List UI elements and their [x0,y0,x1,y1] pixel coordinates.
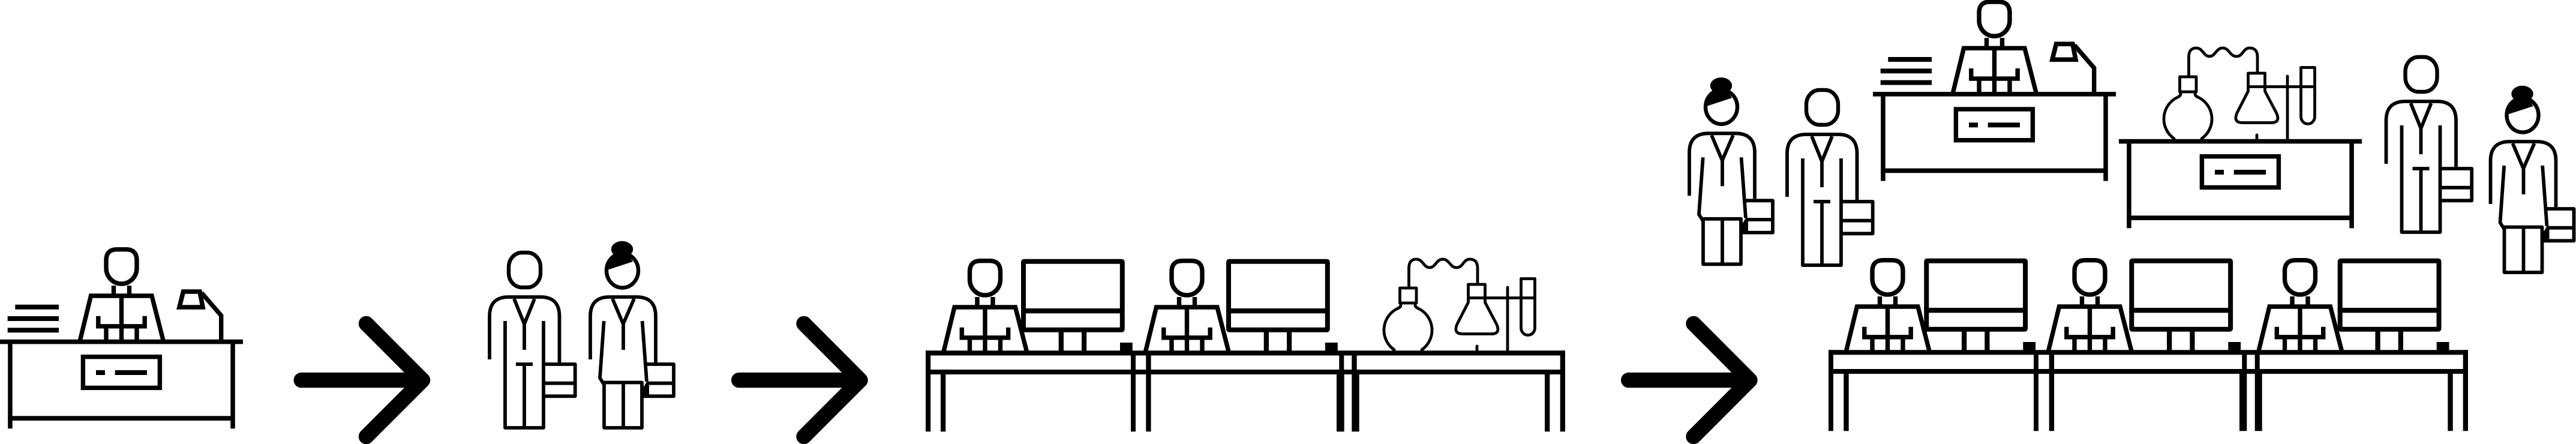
person at desk [80,250,163,340]
lab glassware: flasks and test tube [1384,259,1535,350]
monitor 2 [1226,262,1338,351]
monitor 2 [2129,261,2241,350]
scientist woman right [2491,86,2574,272]
stage 4: full team [1689,2,2574,431]
lab table with glassware [2119,48,2362,228]
monitor 1 [1924,261,2035,350]
stage 1: single person at a desk [0,250,243,428]
monitor 3 [2338,261,2449,350]
arrow 1 [301,323,422,437]
person 2 [1146,261,1229,352]
person 1 [944,261,1027,352]
scientist woman [590,241,674,428]
desk items: papers and lamp [8,292,221,340]
worker 3 [2259,260,2342,351]
manager at desk [1873,2,2116,181]
worker 2 [2048,260,2131,351]
stage 3: two computer workers and lab bench [926,259,1565,431]
worker 1 [1847,260,1929,351]
arrow 3 [1629,323,1750,437]
monitor 1 [1021,262,1133,351]
scientist woman left [1689,77,1773,264]
scientist man [490,253,575,428]
desk [0,340,243,428]
scientist man left [1787,90,1873,265]
scientist man right [2386,57,2472,232]
arrow 2 [739,323,860,437]
bench [1829,350,2468,431]
stage 2: two scientists [490,241,674,428]
bench [926,350,1565,431]
